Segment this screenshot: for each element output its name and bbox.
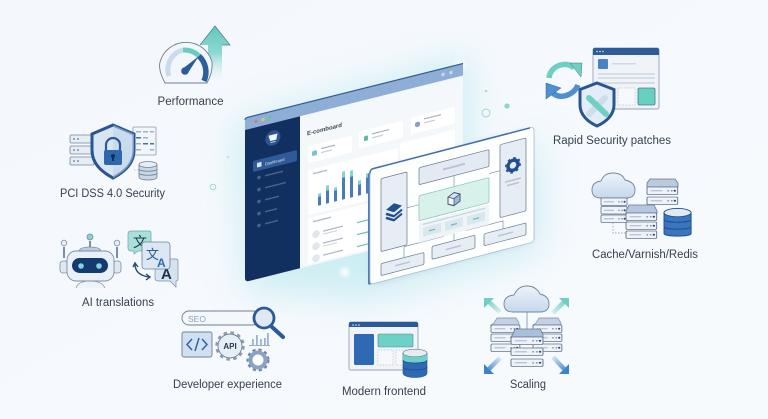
active nav item <box>253 150 297 172</box>
icon: cart <box>266 129 280 147</box>
label: Developer experience: Developer experience <box>173 379 282 391</box>
icon: AI robot <box>60 234 121 288</box>
label: PCI DSS: PCI DSS 4.0 Security <box>60 188 165 200</box>
connectors <box>404 163 503 258</box>
service buttons <box>419 205 489 243</box>
nav items <box>257 169 286 228</box>
icon: translation bubbles: A <box>161 266 172 283</box>
icon: translation bubbles: 文 <box>133 232 147 252</box>
bar chart <box>308 148 398 215</box>
icon: developer SEO tools: SEO <box>188 314 206 324</box>
architecture window <box>368 127 534 285</box>
label: Performance: Performance <box>158 96 224 108</box>
icon: developer SEO tools: API <box>223 342 237 351</box>
label: Cache/Varnish/Redis: Cache/Varnish/Redis <box>592 249 698 261</box>
icon: cache servers <box>592 173 691 238</box>
bottom boxes <box>381 222 526 276</box>
active nav item: Dashboard <box>265 157 285 166</box>
label: Rapid Security patches: Rapid Security patches <box>553 135 671 147</box>
icon: translation bubbles: 文 <box>146 244 159 263</box>
label: AI translations: AI translations <box>82 297 154 309</box>
icon: translation bubbles <box>128 231 178 287</box>
list card <box>308 196 398 264</box>
green core box <box>419 178 489 221</box>
icon: developer SEO tools <box>182 308 283 370</box>
chart side panel <box>400 130 455 209</box>
icon: PCI DSS shield <box>70 125 157 180</box>
left panel: layers <box>381 172 407 252</box>
icon: translation bubbles: A <box>157 256 166 270</box>
top box <box>419 150 489 185</box>
stat cards <box>308 106 455 163</box>
window shadow <box>372 131 530 283</box>
icon: modern frontend <box>349 322 427 378</box>
label: Modern frontend: Modern frontend <box>342 386 426 398</box>
window title bar <box>245 64 463 130</box>
central glow <box>235 55 540 300</box>
title text: E-comboard <box>307 122 342 137</box>
icon: performance gauge and arrow <box>160 26 230 83</box>
decorative dots <box>210 60 510 276</box>
label: Scaling: Scaling <box>510 379 546 391</box>
right panel: gear <box>500 138 526 218</box>
icon: rapid security patches <box>546 48 659 126</box>
main dashboard window <box>245 64 463 282</box>
sidebar <box>245 116 300 282</box>
icon: scaling <box>484 286 569 374</box>
